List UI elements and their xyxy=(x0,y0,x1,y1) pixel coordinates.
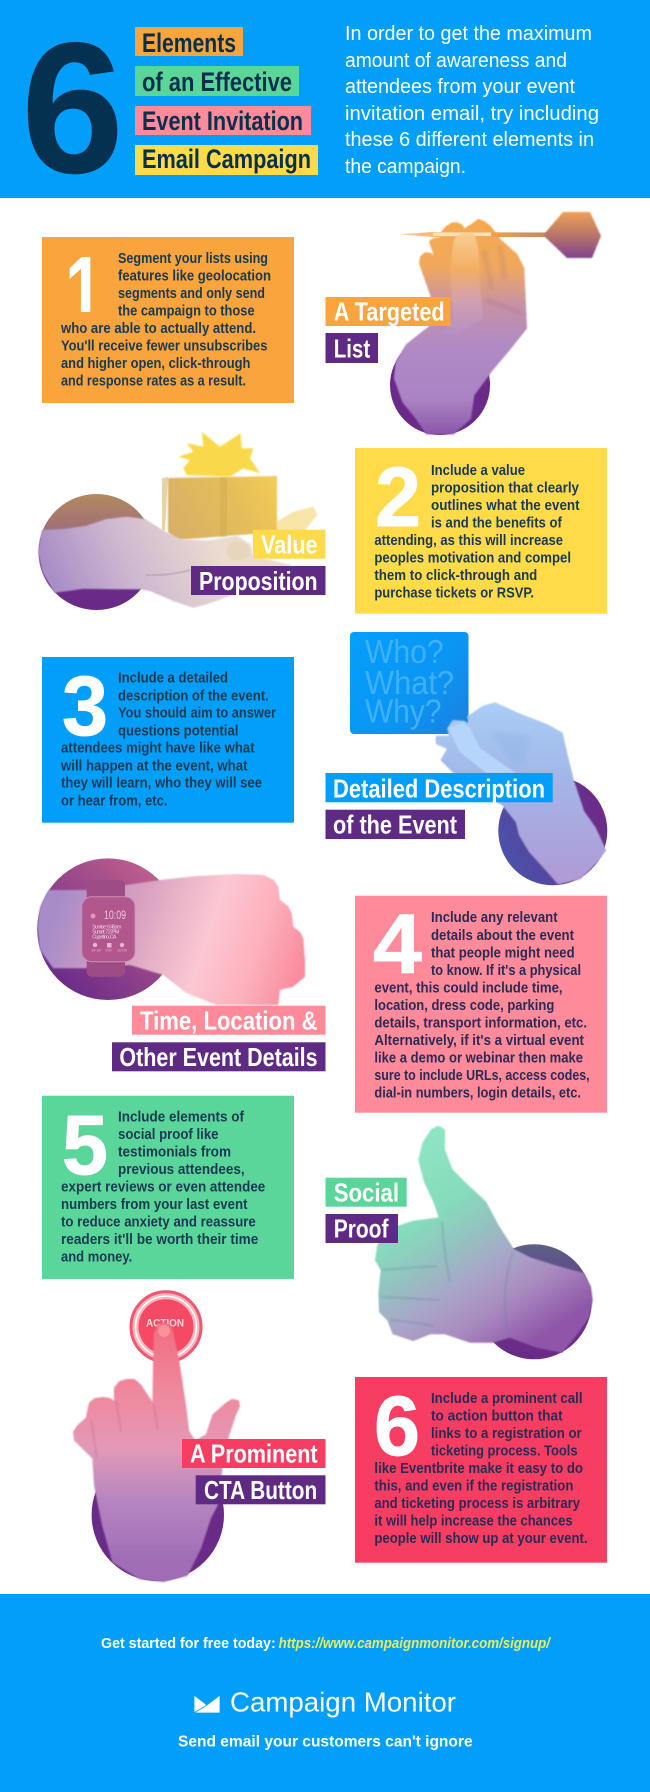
hand xyxy=(395,220,526,433)
card 2 text: outlines what the event xyxy=(431,497,580,514)
number 4: 4 xyxy=(373,897,422,991)
card 6 text: and ticketing process is arbitrary xyxy=(374,1495,581,1512)
label: A Prominent CTA Button: A Prominent xyxy=(190,1438,318,1468)
label: Social Proof: Social xyxy=(334,1178,399,1208)
front finger xyxy=(440,233,483,335)
card 6 text: it will help increase the chances xyxy=(374,1513,573,1530)
call to action line: https://www.campaignmonitor.com/signup/ xyxy=(279,1635,552,1652)
card 6 text: people will show up at your event. xyxy=(374,1530,588,1547)
label: Value Proposition xyxy=(191,529,326,596)
watch: 14:30 xyxy=(91,948,102,952)
card 5 text: previous attendees, xyxy=(118,1161,245,1178)
icon: Campaign Monitor envelope xyxy=(194,1695,220,1713)
illustration: hand holding question card xyxy=(326,632,607,885)
card 4 text: event, this could include time, xyxy=(374,979,563,996)
intro paragraph: In order to get the maximum xyxy=(345,22,592,45)
card 1 text: features like geolocation xyxy=(118,268,271,285)
card 5 text: and money. xyxy=(61,1249,132,1266)
intro paragraph: attendees from your event xyxy=(345,75,575,98)
action button xyxy=(131,1292,201,1362)
card 4 text: dial-in numbers, login details, etc. xyxy=(374,1084,581,1101)
dart shaft xyxy=(400,232,552,237)
card 3 text: You should aim to answer xyxy=(118,705,276,722)
card 6 text: this, and even if the registration xyxy=(374,1478,573,1495)
card 1 text: and response rates as a result. xyxy=(61,373,246,390)
card 4 text: Include any relevant xyxy=(431,909,558,926)
panel: card 6 xyxy=(355,1377,607,1563)
card 2 text: is and the benefits of xyxy=(431,514,563,531)
watch: Cupertino, CA xyxy=(92,934,117,940)
card 5 text: testimonials from xyxy=(118,1144,231,1161)
card 4 text xyxy=(374,909,590,1101)
hand xyxy=(39,518,290,607)
card 5 text: expert reviews or even attendee xyxy=(61,1179,265,1196)
big number 6: 6 xyxy=(21,4,124,212)
card 1 text: Segment your lists using xyxy=(118,250,268,267)
label: Detailed Description of the Event: of the Event xyxy=(333,809,457,839)
label: A Targeted List: List xyxy=(334,333,370,363)
watch: 10:09 xyxy=(104,910,126,922)
illustration: hand holding dart xyxy=(326,212,601,435)
number 2: 2 xyxy=(375,450,421,544)
logo wordmark: Campaign Monitor xyxy=(230,1687,456,1718)
intro paragraph: the campaign. xyxy=(345,155,466,178)
card 4 text: details, transport information, etc. xyxy=(374,1014,587,1031)
card 2 text: purchase tickets or RSVP. xyxy=(374,584,534,601)
card 4 text: location, dress code, parking xyxy=(374,997,554,1014)
card 5 text: readers it'll be worth their time xyxy=(61,1231,258,1248)
arm and fist xyxy=(37,874,305,1005)
label: A Targeted List: A Targeted xyxy=(334,297,445,327)
label: Time, Location & Other Event Details: Other Event Details xyxy=(119,1042,318,1072)
card 2 text: attending, as this will increase xyxy=(374,532,563,549)
hand xyxy=(74,1323,239,1581)
card 2 text: Include a value xyxy=(431,462,525,479)
number 3: 3 xyxy=(62,659,108,753)
card 2 text: proposition that clearly xyxy=(431,479,580,496)
label: Time, Location & Other Event Details: Time, Location & xyxy=(140,1005,318,1035)
action button: ACTION xyxy=(146,1318,184,1330)
label: Detailed Description of the Event xyxy=(326,773,553,839)
illustration: hand holding gift xyxy=(38,432,326,610)
header band xyxy=(0,0,650,212)
number 6: 6 xyxy=(374,1379,420,1473)
card 5 text: to reduce anxiety and reassure xyxy=(61,1214,256,1231)
card 6 text: ticketing process. Tools xyxy=(431,1443,578,1460)
card 6 text: like Eventbrite make it easy to do xyxy=(374,1460,583,1477)
hand xyxy=(437,703,605,883)
card 2 text: peoples motivation and compel xyxy=(374,549,571,566)
card 3 text: questions potential xyxy=(118,723,238,740)
label: Value Proposition: Proposition xyxy=(199,566,318,596)
card 5 text: social proof like xyxy=(118,1126,218,1143)
gift bow xyxy=(178,432,260,477)
label: A Targeted List xyxy=(326,297,450,363)
card 6 text: links to a registration or xyxy=(431,1425,582,1442)
card 1 text: segments and only send xyxy=(118,285,265,302)
intro paragraph: these 6 different elements in xyxy=(345,128,594,151)
label: A Prominent CTA Button xyxy=(182,1438,326,1505)
label: A Prominent CTA Button: CTA Button xyxy=(204,1475,317,1505)
card 4 text: details about the event xyxy=(431,927,574,944)
watch: 10:00 xyxy=(117,948,128,952)
footer band xyxy=(0,1594,650,1792)
card 2 text: them to click-through and xyxy=(374,567,537,584)
label: Value Proposition: Value xyxy=(261,529,318,559)
gift box xyxy=(162,476,277,540)
intro paragraph xyxy=(345,22,599,178)
card 2 text xyxy=(374,462,580,601)
label: Time, Location & Other Event Details xyxy=(112,1005,326,1072)
card 3 text: attendees might have like what xyxy=(61,740,255,757)
question card xyxy=(350,632,468,734)
card 4 text: like a demo or webinar then make xyxy=(374,1049,583,1066)
tagline: Send email your customers can't ignore xyxy=(178,1734,473,1751)
dart flight xyxy=(545,212,601,258)
card 1 text: who are able to actually attend. xyxy=(60,320,256,337)
panel: card 2 xyxy=(355,448,607,614)
panel: card 4 xyxy=(355,896,607,1113)
card 6 text: Include a prominent call xyxy=(431,1390,582,1407)
card 4 text: sure to include URLs, access codes, xyxy=(374,1067,590,1084)
question card: Why? xyxy=(365,693,442,730)
card 3 text: they will learn, who they will see xyxy=(61,775,262,792)
gift fingers xyxy=(277,507,317,545)
card 4 text: to know. If it's a physical xyxy=(431,962,581,979)
label: Social Proof: Proof xyxy=(334,1214,389,1244)
card 1 text: You'll receive fewer unsubscribes xyxy=(61,338,267,355)
card 3 text: or hear from, etc. xyxy=(61,793,168,810)
card 4 text: Alternatively, if it's a virtual event xyxy=(374,1032,584,1049)
number 1: 1 xyxy=(65,236,103,348)
intro paragraph: invitation email, try including xyxy=(345,102,599,125)
card 3 text: Include a detailed xyxy=(118,670,228,687)
watch: 700 xyxy=(105,948,112,952)
watch xyxy=(82,880,135,977)
question card: Who? xyxy=(365,633,444,670)
card 3 text: will happen at the event, what xyxy=(60,758,248,775)
label: Detailed Description of the Event: Detailed Description xyxy=(333,773,545,803)
call to action line xyxy=(101,1635,552,1652)
intro paragraph: amount of awareness and xyxy=(345,49,567,72)
panel: card 1 xyxy=(42,236,294,403)
panel: card 3 xyxy=(42,657,294,823)
illustration: finger pressing action button xyxy=(74,1292,326,1581)
card 1 text: the campaign to those xyxy=(118,303,255,320)
card 5 text xyxy=(61,1109,265,1266)
label: Social Proof xyxy=(326,1178,407,1244)
title line: Elements: Elements xyxy=(142,28,236,58)
card 3 text xyxy=(60,670,276,810)
title line: of an Effective: of an Effective xyxy=(142,67,292,97)
card 6 text: to action button that xyxy=(431,1408,563,1425)
question card: What? xyxy=(365,664,454,701)
illustration: wrist with smart watch xyxy=(37,858,325,1072)
call to action line: Get started for free today: xyxy=(101,1635,276,1652)
number 5: 5 xyxy=(62,1098,108,1192)
panel: card 5 xyxy=(42,1096,294,1279)
illustration: thumbs up hand xyxy=(326,1127,592,1359)
title line: Email Campaign: Email Campaign xyxy=(142,144,311,174)
card 6 text xyxy=(374,1390,588,1547)
card 3 text: description of the event. xyxy=(118,688,269,705)
card 1 text xyxy=(60,250,271,390)
card 4 text: that people might need xyxy=(431,944,575,961)
card 1 text: and higher open, click-through xyxy=(61,355,250,372)
watch: Sunset: 7:27PM xyxy=(92,930,119,936)
title line: Event Invitation: Event Invitation xyxy=(142,106,303,136)
card 5 text: Include elements of xyxy=(118,1109,245,1126)
watch: Sunrise: 6:45am xyxy=(92,924,121,930)
card 5 text: numbers from your last event xyxy=(61,1196,248,1213)
